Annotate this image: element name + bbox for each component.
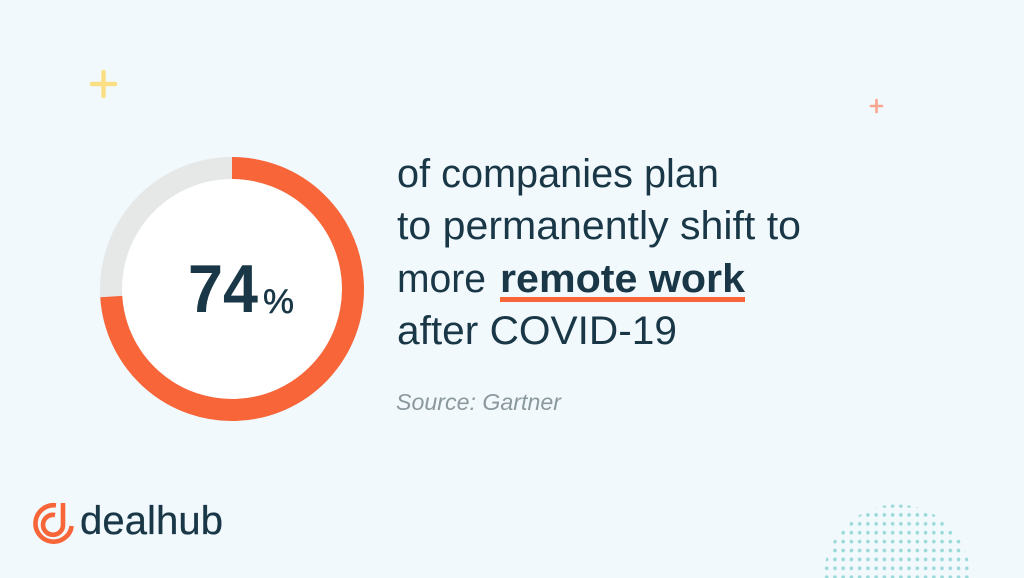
icon: small orange plus (871, 100, 882, 112)
icon: yellow plus (92, 72, 115, 96)
statement text: after COVID-19 (397, 309, 677, 353)
highlight underline (500, 297, 745, 302)
logo mark (35, 503, 72, 542)
source: Source: Gartner (396, 389, 562, 415)
donut value: 74 (188, 251, 258, 327)
donut chart: 74% (111, 168, 353, 410)
statement text: remote work (500, 257, 746, 301)
statement text: to permanently shift to (397, 204, 801, 248)
statement text (397, 152, 801, 353)
logo wordmark: dealhub (80, 499, 223, 543)
statement text: more (397, 257, 486, 301)
dot semicircle decoration (824, 504, 970, 578)
logo: dealhub (35, 499, 223, 543)
donut value: % (263, 283, 294, 321)
statement text: of companies plan (397, 152, 719, 196)
